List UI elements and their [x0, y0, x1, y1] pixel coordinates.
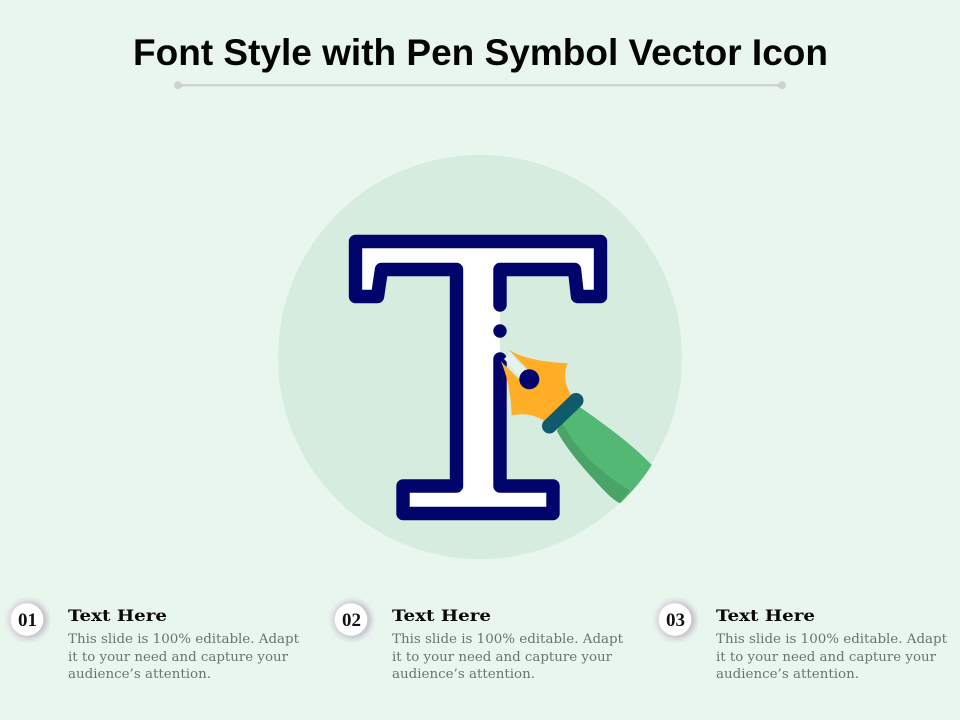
body text: This slide is 100% editable. Adapt — [716, 632, 948, 647]
heading: Text Here — [392, 606, 491, 625]
heading: Text Here — [716, 606, 815, 625]
pen collar — [550, 400, 576, 426]
letter T outline — [356, 242, 600, 514]
body text: it to your need and capture your — [716, 650, 937, 665]
body text — [68, 632, 300, 682]
icon: letter T with pen — [356, 242, 652, 514]
outline dot — [493, 324, 507, 338]
body text: audience’s attention. — [716, 667, 859, 682]
item 01 — [4, 596, 300, 682]
pen body — [557, 406, 652, 503]
body text: This slide is 100% editable. Adapt — [392, 632, 624, 647]
title divider — [174, 81, 786, 89]
number badge 03 — [652, 596, 700, 644]
letter T fill — [356, 242, 600, 514]
body text — [392, 632, 624, 682]
item 03 — [652, 596, 948, 682]
body text: audience’s attention. — [68, 667, 211, 682]
title: Font Style with Pen Symbol Vector Icon — [133, 32, 828, 73]
body text: This slide is 100% editable. Adapt — [68, 632, 300, 647]
body text — [716, 632, 948, 682]
number badge 03: 03 — [666, 610, 685, 631]
heading: Text Here — [68, 606, 167, 625]
number badge 02 — [328, 596, 376, 644]
number badge 01 — [4, 596, 52, 644]
number badge 02: 02 — [342, 610, 361, 631]
number badge 01: 01 — [18, 610, 37, 631]
pen nib — [501, 350, 571, 422]
item 02 — [328, 596, 624, 682]
body text: it to your need and capture your — [68, 650, 289, 665]
body text: it to your need and capture your — [392, 650, 613, 665]
background circle — [278, 155, 682, 559]
body text: audience’s attention. — [392, 667, 535, 682]
